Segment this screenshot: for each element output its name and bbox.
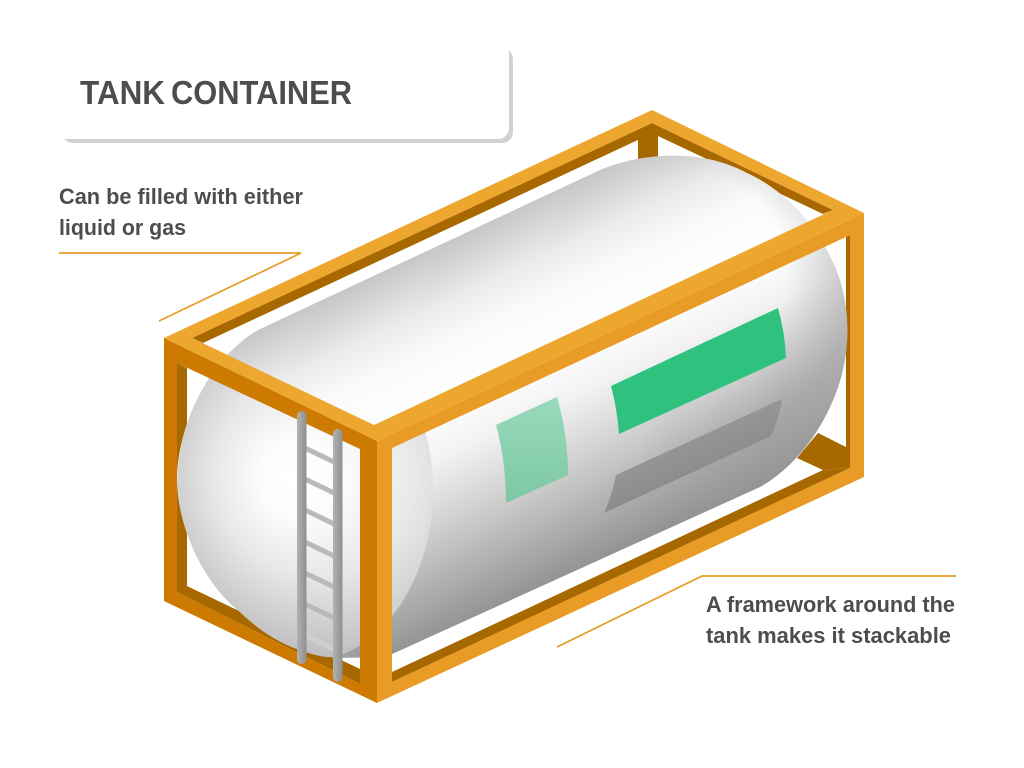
callout: filled with liquid or gas: [59, 184, 303, 321]
title box: CONTAINER: [171, 74, 352, 111]
container frame: rear inner strips: [177, 123, 850, 684]
infographic: tank container: [59, 50, 956, 703]
label panel: green: [611, 308, 786, 434]
callout: filled with liquid or gas: liquid or gas: [59, 215, 186, 240]
container frame: main beams: [164, 110, 864, 703]
title box: TANK: [80, 74, 165, 111]
callout: stackable framework: A framework around the: [706, 592, 955, 617]
callout: stackable framework: tank makes it stackable: [706, 623, 951, 648]
tank: [177, 156, 848, 658]
ladder: [297, 411, 342, 682]
callout: stackable framework: [557, 576, 956, 648]
label panel: grey: [604, 399, 782, 513]
title box: [56, 42, 513, 143]
label panel: faded green: [496, 397, 568, 503]
callout: filled with liquid or gas: Can be filled with either: [59, 184, 303, 209]
